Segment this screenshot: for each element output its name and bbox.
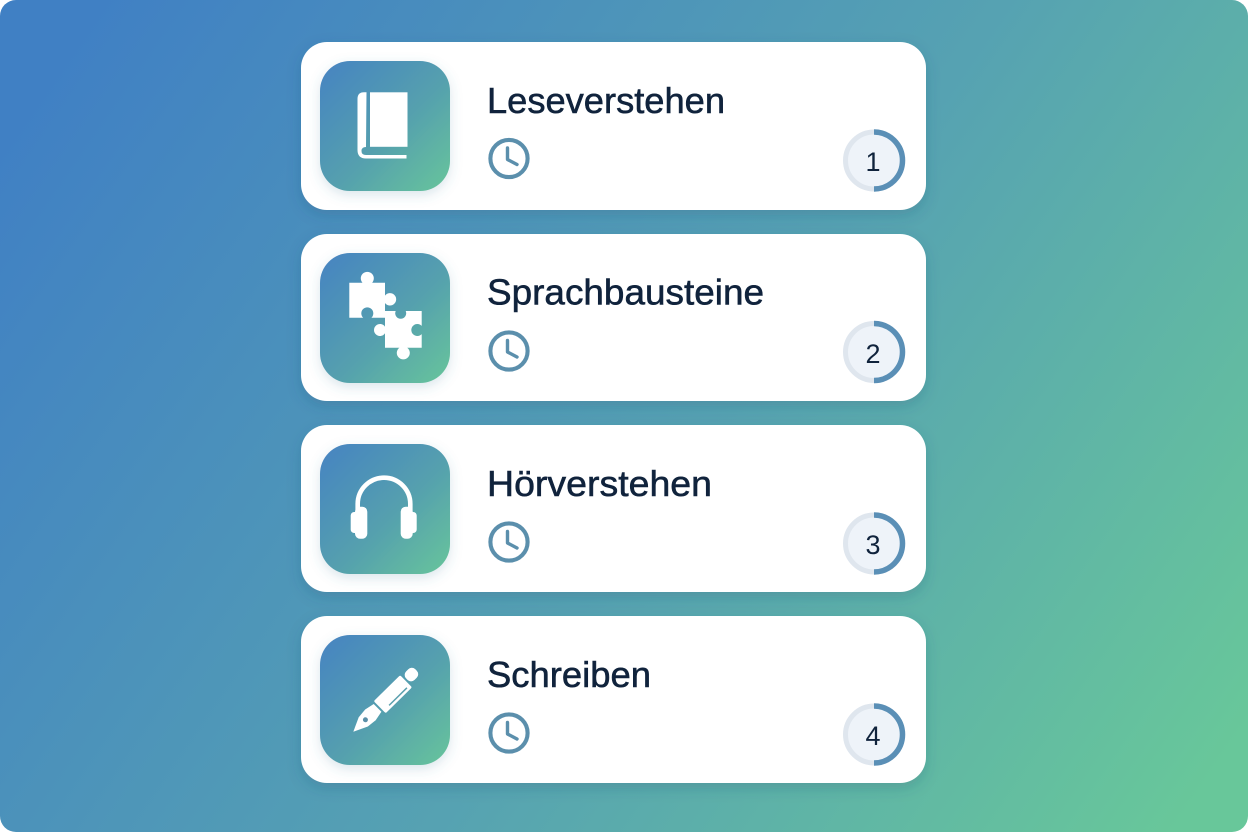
heading: Schreiben: Schreiben xyxy=(487,654,651,695)
panel: Schreiben xyxy=(301,616,926,783)
panel: Hörverstehen xyxy=(301,425,926,592)
progress ring: 2: 2 xyxy=(865,339,881,369)
progress ring: 3: 3 xyxy=(865,530,881,560)
heading: Leseverstehen: Leseverstehen xyxy=(487,80,725,121)
progress ring: 4: 4 xyxy=(865,721,881,751)
icon: clock xyxy=(490,714,528,752)
icon tile: pen xyxy=(320,635,450,765)
progress ring: 4 xyxy=(846,706,902,763)
icon: clock xyxy=(490,523,528,561)
heading: Sprachbausteine: Sprachbausteine xyxy=(487,272,764,312)
heading: Hörverstehen: Hörverstehen xyxy=(487,463,712,504)
panel: Sprachbausteine xyxy=(301,234,926,401)
progress ring: 1: 1 xyxy=(865,147,881,177)
progress ring: 3 xyxy=(846,515,902,572)
icon tile: headphones xyxy=(320,444,450,574)
progress ring: 2 xyxy=(846,324,902,380)
icon: clock xyxy=(490,140,528,177)
icon: clock xyxy=(490,332,528,370)
panel: Leseverstehen xyxy=(301,42,926,210)
icon tile: puzzle xyxy=(320,253,450,383)
icon tile: book xyxy=(320,61,450,191)
progress ring: 1 xyxy=(846,132,902,189)
